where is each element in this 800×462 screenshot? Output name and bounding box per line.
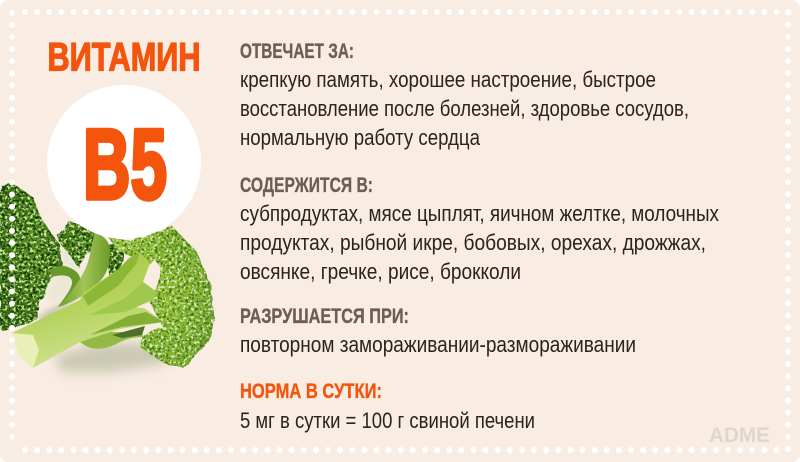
section: contained in: субпродуктах, мясе цыплят, яичном желтке, молочных: [240, 201, 719, 226]
lower branch: [90, 312, 164, 335]
back stem: [58, 232, 110, 307]
stem cut end: [12, 333, 39, 368]
badge: B5: [47, 85, 201, 239]
section: contained in: продуктах, рыбной икре, бобовых, орехах, дрожжах,: [240, 230, 706, 255]
right floret: [140, 226, 215, 368]
section: responsible for: крепкую память, хорошее настроение, быстрое: [240, 67, 656, 92]
dark back floret: [106, 240, 124, 279]
badge: B5: B5: [83, 108, 167, 220]
broccoli illustration: [0, 183, 215, 372]
section: responsible for: восстановление после болезней, здоровье сосудов,: [240, 96, 689, 121]
section: contained in: [240, 174, 719, 284]
section: destroyed by: РАЗРУШАЕТСЯ ПРИ:: [240, 305, 409, 328]
section: responsible for: [240, 40, 689, 150]
section: responsible for: ОТВЕЧАЕТ ЗА:: [240, 40, 354, 63]
lower leaf: [80, 332, 143, 349]
broccoli shadow: [36, 240, 170, 372]
top crown: [108, 232, 160, 264]
main stem: [12, 252, 164, 368]
section: contained in: овсянке, гречке, рисе, брокколи: [240, 259, 521, 284]
left floret: [0, 183, 62, 331]
section: contained in: СОДЕРЖИТСЯ В:: [240, 174, 373, 197]
thin side branch: [50, 266, 80, 307]
section: responsible for: нормальную работу сердца: [240, 125, 481, 150]
section: destroyed by: [240, 305, 636, 357]
back floret: [57, 221, 100, 267]
watermark: ADME: ADME: [709, 424, 770, 447]
section: daily norm: 5 мг в сутки = 100 г свиной печени: [240, 408, 535, 433]
upper branch: [83, 252, 140, 306]
section: daily norm: НОРМА В СУТКИ:: [240, 380, 382, 403]
gap shadow: [112, 326, 145, 338]
middle branch: [90, 282, 157, 315]
section: destroyed by: повторном замораживании-размораживании: [240, 332, 636, 357]
title: ВИТАМИН: [48, 36, 200, 80]
section: daily norm: [240, 380, 535, 433]
